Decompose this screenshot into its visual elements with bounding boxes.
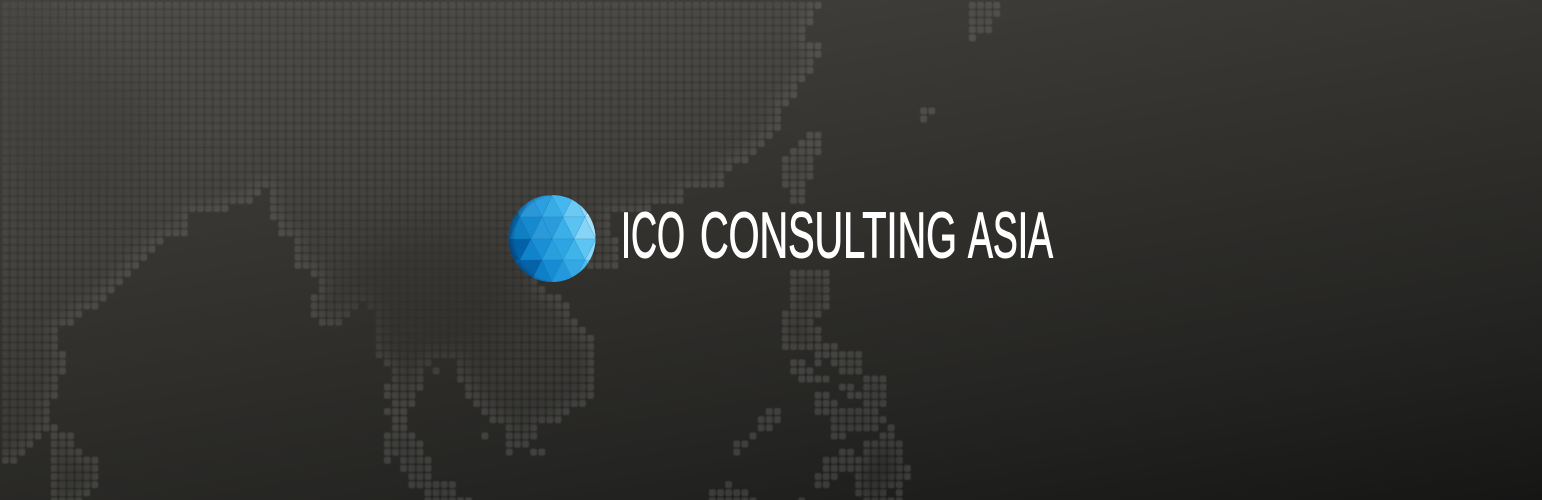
dotted map of Asia xyxy=(1,1,1001,500)
title: company name: ASIA xyxy=(968,200,1053,272)
title: company name: ICO xyxy=(621,200,685,272)
title: company name: CONSULTING xyxy=(700,200,957,272)
icon: faceted blue globe xyxy=(508,195,596,282)
